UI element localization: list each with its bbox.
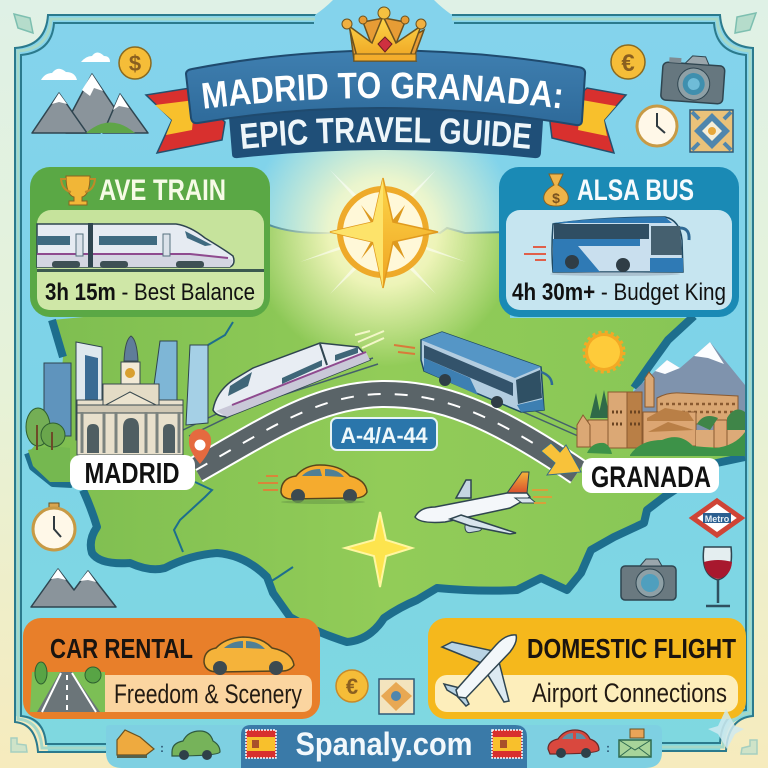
railway track [183, 358, 378, 436]
icon: euro coin: € [621, 50, 635, 77]
top blue tab behind crown [315, 0, 452, 40]
gate building [77, 336, 183, 455]
palace [657, 393, 738, 424]
illustration: Alhambra [577, 342, 745, 456]
lower ribbon [228, 105, 544, 158]
sparkle [708, 709, 744, 749]
footer tab [106, 725, 662, 768]
greenery [630, 432, 745, 456]
train [37, 223, 234, 268]
map of southern Spain [28, 222, 745, 642]
heading: CAR RENTAL [50, 633, 193, 664]
mountains top left [32, 74, 148, 133]
plane [442, 635, 516, 706]
lower strip [37, 272, 264, 310]
icon: dollar coin: $ [129, 51, 141, 76]
icon: money bag: $ [552, 190, 560, 206]
map bus [394, 332, 552, 412]
flag right [492, 730, 522, 758]
icon: money bag [544, 174, 568, 206]
map train [213, 331, 384, 417]
inner strip [105, 675, 312, 712]
caption: 4h 30m+ - Budget King [512, 279, 726, 306]
route label: A-4/A-44 [340, 423, 428, 448]
icon: green car [172, 731, 220, 760]
panel: ALSA bus [499, 167, 739, 317]
caption: 3h 15m - Best Balance [45, 279, 255, 306]
icon: wall clock [637, 106, 677, 146]
icon: red car [548, 730, 599, 758]
icon: envelope [619, 729, 651, 757]
icon: metro sign: Metro [705, 514, 730, 524]
icon: wine glass [703, 547, 732, 606]
panel: car rental [23, 618, 320, 719]
site name: Spanaly.com [296, 726, 472, 762]
dot: : [160, 741, 164, 755]
upper ribbon [186, 50, 585, 125]
clouds [41, 52, 110, 80]
caption: Airport Connections [532, 678, 727, 708]
icon: ferry [117, 730, 154, 758]
inner strip [435, 675, 738, 712]
icon: crown [342, 7, 426, 61]
title line 1: MADRID TO GRANADA: [202, 72, 562, 109]
icon: euro coin [611, 45, 645, 79]
icon: sun [585, 333, 623, 371]
road thumbnail [30, 662, 105, 712]
title line 2: EPIC TRAVEL GUIDE [240, 117, 532, 149]
heading: AVE TRAIN [99, 174, 226, 207]
icon: yellow arrow [541, 443, 581, 475]
north edge line [262, 222, 510, 233]
illustration: Madrid skyline [26, 336, 208, 482]
icon: trophy [61, 176, 95, 205]
map car [258, 465, 367, 504]
icon: azulejo tile lower [379, 679, 414, 714]
icon: map pin [189, 429, 211, 464]
icon: camera lower [621, 559, 676, 600]
caption: Freedom & Scenery [114, 679, 302, 709]
icon: trees [26, 408, 70, 482]
car [204, 637, 294, 675]
mountains lower left [31, 569, 116, 607]
map plane [415, 472, 552, 534]
Madrid label: MADRID [84, 458, 180, 490]
inner card [37, 210, 264, 310]
Portugal border [174, 322, 233, 552]
icon: dollar coin [119, 47, 151, 79]
left flag ribbon [146, 88, 225, 153]
icon: metro sign [693, 501, 741, 535]
cypress trees [590, 390, 610, 418]
road [196, 394, 578, 472]
heading: ALSA BUS [577, 174, 694, 207]
inner card [506, 210, 732, 310]
sun glow [248, 97, 518, 367]
railway track east [496, 395, 578, 436]
panel: domestic flight [428, 618, 746, 719]
title banner [144, 50, 628, 158]
icon: compass star [330, 178, 438, 288]
bus [524, 217, 689, 276]
right flag ribbon [550, 88, 626, 153]
south coast band [83, 480, 690, 642]
dot: : [606, 741, 610, 755]
track [37, 269, 264, 272]
flag left [246, 730, 276, 758]
yellow star [345, 512, 412, 587]
route label [331, 418, 437, 450]
icon: euro coin lower [336, 670, 368, 702]
panel: AVE train [30, 167, 270, 317]
land mass [28, 222, 745, 642]
icon: azulejo tile [690, 110, 733, 152]
icon: stopwatch [33, 503, 75, 550]
sun rays [300, 170, 466, 294]
footer [106, 725, 662, 768]
icon: camera top right [661, 54, 726, 104]
mountains [633, 342, 745, 430]
west and east coast bands [28, 316, 745, 484]
icon: euro coin lower: € [346, 674, 358, 699]
footer bar [241, 725, 527, 768]
Granada label: GRANADA [591, 461, 711, 494]
